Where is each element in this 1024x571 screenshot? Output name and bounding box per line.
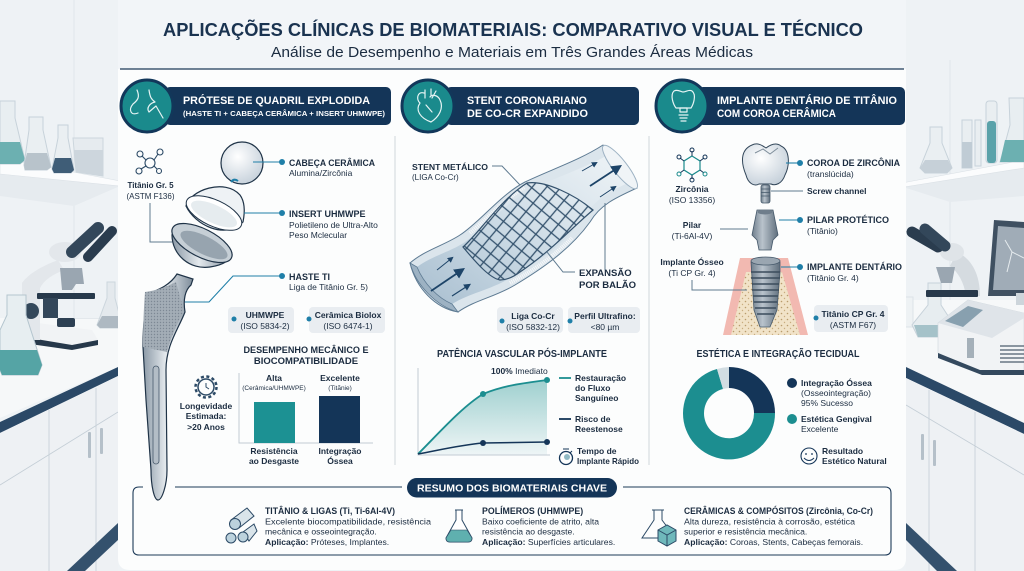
callout: coroa: COROA DE ZIRCÔNIA	[807, 157, 900, 168]
summary: polymers	[482, 506, 615, 547]
heading: hip	[121, 80, 391, 132]
label: longevity: >20 Anos	[187, 422, 225, 432]
summary: ceramics	[684, 505, 873, 547]
callout: insert uhmwpe	[244, 209, 378, 240]
callout: screw channel	[771, 186, 867, 196]
chip: ceramica biolox: (ISO 6474-1)	[323, 321, 373, 331]
line chart	[418, 366, 550, 455]
label: implante osseo: Implante Ósseo	[660, 256, 724, 267]
heading pill	[407, 478, 617, 498]
legend: gingival aesthetics: Estética Gengival	[801, 414, 872, 424]
icon: implant in bone	[723, 257, 808, 335]
legend: bone integration: 95% Sucesso	[801, 398, 853, 408]
bar chart: ao Desgaste	[249, 456, 299, 466]
heading: hip: (HASTE TI + CABEÇA CERÂMICA + INSERT UHMWPE)	[183, 109, 386, 118]
chip: titanio cp: Titânio CP Gr. 4	[822, 309, 885, 319]
icon: femoral stem	[143, 274, 193, 500]
heading: dental: IMPLANTE DENTÁRIO DE TITÂNIO	[717, 94, 897, 107]
heading: mechanical performance: DESEMPENHO MECÂNICO E	[244, 344, 368, 356]
callout: haste ti	[185, 272, 368, 302]
heading: stent: STENT CORONARIANO	[467, 95, 587, 107]
label: pilar	[672, 220, 748, 241]
label: titanio gr 5: (ASTM F136)	[126, 192, 175, 201]
icon: ceramic flask and cube	[642, 510, 676, 546]
label: titanio gr 5: Titânio Gr. 5	[127, 181, 174, 190]
bar chart	[239, 373, 373, 466]
donut chart	[683, 367, 775, 459]
heading: hip: PRÓTESE DE QUADRIL EXPLODIDA	[183, 94, 370, 107]
chip: ceramica biolox: Cerâmica Biolox	[315, 310, 382, 320]
summary: ceramics: Alta dureza, resistência à corrosão, estética	[684, 516, 855, 526]
panel: coronary stent	[402, 80, 642, 466]
main panel	[118, 0, 906, 570]
heading: mechanical performance	[244, 344, 368, 367]
callout: stent metalico	[412, 162, 520, 185]
icon: smile	[801, 448, 817, 464]
heading: aesthetics: ESTÉTICA E INTEGRAÇÃO TECIDUAL	[696, 347, 860, 360]
callout: coroa	[786, 157, 900, 179]
icon: stopwatch	[560, 449, 572, 464]
legend: blood flow	[559, 373, 626, 403]
legend: blood flow: Sanguíneo	[575, 393, 618, 403]
label: natural result: Estético Natural	[822, 456, 887, 466]
summary: ceramics: CERÂMICAS & COMPÓSITOS (Zircônia, Co-Cr)	[684, 505, 873, 516]
label: zirconia	[669, 184, 715, 205]
legend: bone integration	[787, 377, 872, 408]
label: implant time	[577, 446, 639, 466]
heading: stent	[402, 80, 639, 132]
bar chart: Óssea	[327, 455, 353, 466]
callout: pilar protetico	[779, 215, 889, 236]
label: longevity: Estimada:	[186, 411, 226, 421]
icon: molecule titanium	[136, 149, 163, 174]
callout: pilar protetico: (Titânio)	[807, 226, 838, 236]
callout: stent metalico: STENT METÁLICO	[412, 162, 488, 172]
summary: ceramics: superior e resistência mecânica.	[684, 526, 807, 536]
label: pilar: Pilar	[683, 220, 702, 230]
callout: implante dentario	[781, 262, 902, 283]
chip: uhmwpe iso: UHMWPE	[246, 310, 285, 320]
icon: gear clock	[196, 376, 216, 398]
panel: dental implant	[656, 80, 905, 466]
legend: gingival aesthetics	[787, 414, 872, 434]
bar chart: (Cerâmica/UHMWPE)	[242, 385, 306, 392]
summary: polymers: resistência ao desgaste.	[482, 526, 575, 536]
summary: titanium: mecânica e osseointegração.	[265, 526, 377, 536]
legend: bone integration: Integração Óssea	[801, 377, 872, 388]
callout: pilar protetico: PILAR PROTÉTICO	[807, 215, 889, 225]
label: zirconia: Zircônia	[675, 184, 709, 194]
heading: dental: COM COROA CERÂMICA	[717, 107, 836, 120]
label: zirconia: (ISO 13356)	[669, 195, 715, 205]
chip: liga co-cr	[497, 307, 563, 333]
icon: stent in vessel	[410, 141, 642, 312]
chip: titanio cp	[814, 305, 888, 332]
heading: stent: DE CO-CR EXPANDIDO	[467, 108, 588, 120]
legend: blood flow: Restauração	[575, 373, 626, 383]
summary: ceramics: Aplicação: Coroas, Stents, Cabeças femorais.	[684, 537, 863, 547]
legend: blood flow: do Fluxo	[575, 383, 610, 393]
chip: uhmwpe iso	[228, 307, 294, 333]
callout: coroa: (translúcida)	[807, 169, 854, 179]
label: implant time: Implante Rápido	[577, 456, 639, 466]
label: pilar: (Ti-6Al-4V)	[672, 231, 713, 241]
callout: insert uhmwpe: INSERT UHMWPE	[289, 209, 366, 219]
callout: balloon expansion: POR BALÃO	[579, 280, 636, 291]
callout: insert uhmwpe: Peso Mclecular	[289, 230, 347, 240]
callout: balloon expansion: EXPANSÃO	[579, 268, 632, 279]
background: laboratory right side	[893, 0, 1024, 571]
heading pill: RESUMO DOS BIOMATERIAIS CHAVE	[417, 482, 607, 494]
panel: hip prosthesis	[121, 80, 391, 500]
label: natural result	[822, 446, 887, 466]
summary: titanium	[265, 505, 431, 547]
callout: screw channel: Screw channel	[807, 186, 867, 196]
legend: restenosis	[559, 414, 623, 434]
bar chart: Alta	[266, 373, 282, 383]
callout: balloon expansion	[547, 203, 636, 291]
background: laboratory left side	[0, 0, 122, 571]
callout: cabeca ceramica: Alumina/Zircônia	[289, 168, 353, 178]
heading: dental	[656, 80, 905, 132]
legend: gingival aesthetics: Excelente	[801, 424, 839, 434]
icon: ceramic head	[221, 142, 263, 184]
summary: polymers: POLÍMEROS (UHMWPE)	[482, 506, 583, 516]
label: natural result: Resultado	[822, 446, 863, 456]
heading: vascular patency: PATÊNCIA VASCULAR PÓS-IMPLANTE	[437, 347, 607, 360]
icon: molecule zirconia	[677, 148, 707, 182]
icon: uhmwpe insert	[181, 187, 247, 237]
callout: cabeca ceramica	[253, 157, 375, 178]
callout: haste ti: HASTE TI	[289, 272, 330, 282]
bar chart: (Titãnie)	[328, 385, 352, 392]
chip: uhmwpe iso: (ISO 5834-2)	[240, 321, 290, 331]
legend: restenosis: Risco de	[575, 414, 611, 424]
label: titanio gr 5	[126, 181, 175, 242]
summary: titanium: TITÂNIO & LIGAS (Ti, Ti-6Al-4V)	[265, 505, 395, 516]
bar chart: Resistência	[250, 446, 298, 456]
chip: perfil ultrafino	[568, 307, 640, 333]
callout: stent metalico: (LIGA Co-Cr)	[412, 173, 459, 182]
chip: perfil ultrafino: <80 µm	[591, 322, 619, 332]
label: longevity	[180, 401, 232, 432]
chip: liga co-cr: (ISO 5832-12)	[506, 322, 560, 332]
icon: titanium rods	[226, 508, 257, 543]
summary: titanium: Aplicação: Próteses, Implantes.	[265, 537, 389, 547]
icon: zirconia crown	[742, 144, 788, 203]
label: implante osseo	[660, 256, 747, 290]
heading: mechanical performance: BIOCOMPATIBILIDADE	[254, 356, 358, 367]
summary: polymers: Aplicação: Superfícies articulares.	[482, 537, 615, 547]
chip: perfil ultrafino: Perfil Ultrafino:	[574, 311, 636, 321]
label: implante osseo: (Ti CP Gr. 4)	[668, 268, 716, 278]
panel: biomaterials summary	[133, 478, 891, 555]
callout: insert uhmwpe: Polietileno de Ultra-Alto	[289, 220, 378, 230]
icon: abutment	[752, 210, 778, 250]
callout: implante dentario: IMPLANTE DENTÁRIO	[807, 262, 902, 272]
subtitle: Análise de Desempenho e Materiais em Três Grandes Áreas Médicas	[271, 44, 753, 61]
legend: bone integration: (Osseointegração)	[801, 388, 871, 398]
chip: ceramica biolox	[306, 307, 385, 333]
label: longevity: Longevidade	[180, 401, 232, 411]
callout: cabeca ceramica: CABEÇA CERÂMICA	[289, 157, 375, 168]
line chart: 100% Imediato	[491, 366, 548, 376]
callout: implante dentario: (Titânio Gr. 4)	[807, 273, 859, 283]
label: implant time: Tempo de	[577, 446, 617, 456]
bar chart: Excelente	[320, 373, 360, 383]
bar chart: Integração	[318, 446, 362, 456]
title: APLICAÇÕES CLÍNICAS DE BIOMATERIAIS: COMPARATIVO VISUAL E TÉCNICO	[163, 19, 863, 40]
icon: polymer flask	[446, 510, 472, 542]
callout: haste ti: Liga de Titânio Gr. 5)	[289, 282, 368, 292]
chip: liga co-cr: Liga Co-Cr	[511, 311, 555, 321]
summary: polymers: Baixo coeficiente de atrito, alta	[482, 516, 599, 526]
icon: metal cup	[166, 216, 238, 270]
chip: titanio cp: (ASTM F67)	[830, 320, 876, 330]
legend: restenosis: Reestenose	[575, 424, 623, 434]
summary: titanium: Excelente biocompatibilidade, resistência	[265, 516, 431, 526]
